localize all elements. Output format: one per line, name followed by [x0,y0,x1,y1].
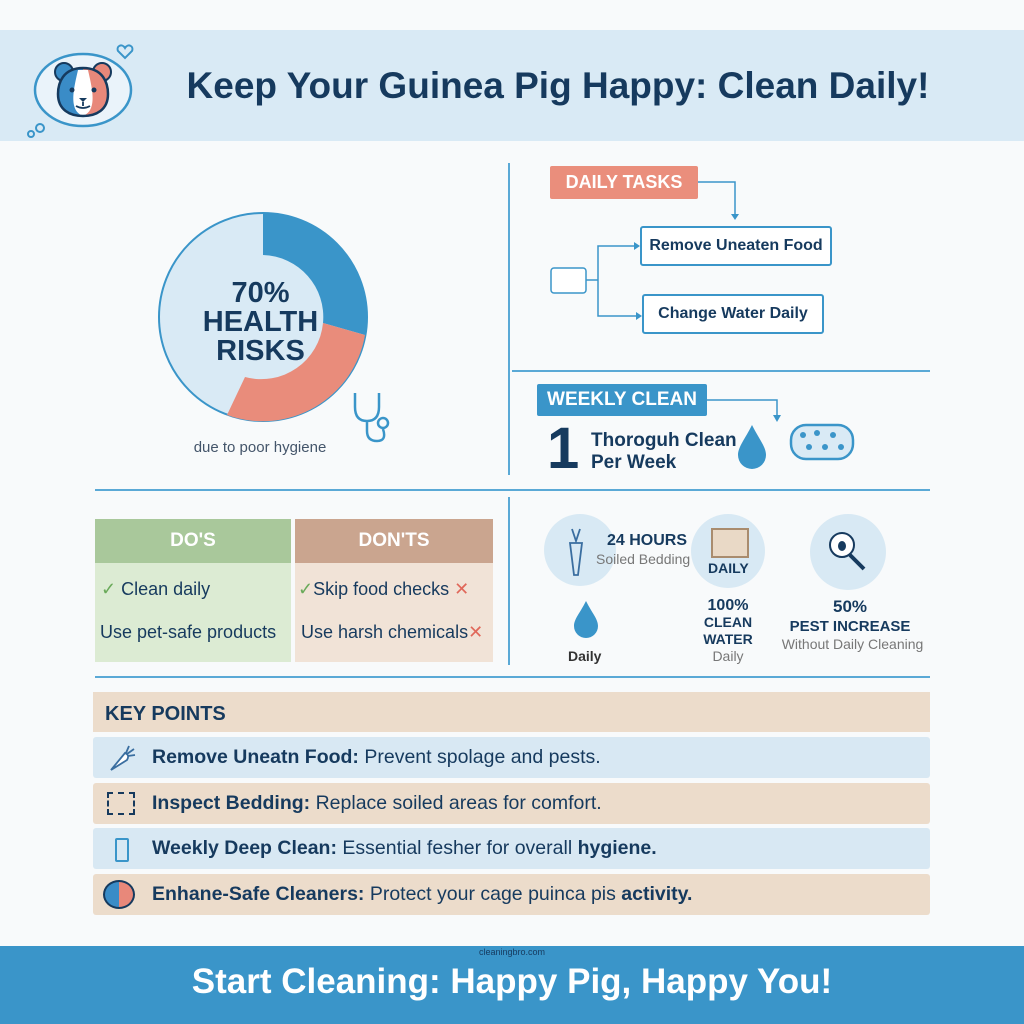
icon: stethoscope [354,393,390,442]
task box: change water: Change Water Daily [658,305,808,322]
key point: weekly deep clean: Weekly Deep Clean: Essential fesher for overall hygiene. [152,837,657,859]
big number 1: 1 [547,416,579,481]
stat: 24 hours [544,514,616,586]
donut label [203,277,318,367]
icon: guinea pig speech bubble [27,44,134,138]
stats panel: Soiled Bedding [596,551,690,567]
key point: remove uneaten food [93,737,930,778]
donut label: HEALTH [203,306,318,338]
label: weekly clean: WEEKLY CLEAN [547,389,697,410]
task box: remove uneaten food [640,226,832,266]
stats panel [544,514,923,664]
donut label: RISKS [216,335,305,367]
label: daily tasks [550,166,698,199]
footer slogan: Start Cleaning: Happy Pig, Happy You! [192,962,832,1001]
weekly text: Per Week [591,452,676,473]
icon: water drop [738,425,766,469]
stat: daily bedding [691,514,765,588]
stats panel: Daily [712,648,744,664]
panel: don'ts: ✓Skip food checks ✕ [298,579,469,599]
header band [0,30,1024,141]
panel: don'ts: Use harsh chemicals✕ [301,622,483,642]
stats panel: Daily [568,648,601,664]
stat: 100% clean water [703,597,753,647]
weekly clean section [537,384,854,481]
key points header: KEY POINTS [105,703,226,725]
title: Keep Your Guinea Pig Happy: Clean Daily! [187,65,929,106]
panel: don'ts [295,519,493,662]
label: daily tasks: DAILY TASKS [566,172,682,192]
stat: 100% clean water: 100% [708,597,748,614]
stat: water daily [574,601,598,638]
key points header [93,692,930,732]
key point: inspect bedding [93,783,930,824]
icon: sponge [790,424,854,460]
key point: weekly deep clean [93,828,930,869]
source: cleaningbro.com [479,947,545,957]
stats panel: 24 HOURS [607,532,687,549]
key point: inspect bedding: Inspect Bedding: Replace soiled areas for comfort. [152,792,602,814]
donut chart: 70% health risks [158,212,390,456]
panel: do's: ✓ Clean daily [101,579,210,599]
caption: due to poor hygiene [194,439,326,456]
weekly text [591,430,737,473]
key point: safe cleaners [93,874,930,915]
footer banner [0,946,1024,1024]
label: weekly clean [537,384,707,416]
stats panel: Without Daily Cleaning [782,636,923,652]
weekly text: Thoroguh Clean [591,430,737,451]
task box: remove uneaten food: Remove Uneaten Food [649,237,823,254]
stats panel: PEST INCREASE [790,618,910,635]
panel: do's: Use pet-safe products [100,622,276,642]
stat: 100% clean water: CLEAN [704,614,752,630]
stats panel: 50% [833,597,867,616]
stat: 100% clean water: WATER [703,631,753,647]
flowchart: daily tasks [550,166,832,334]
key point: remove uneaten food: Remove Uneatn Food: Prevent spolage and pests. [152,746,601,768]
panel: do's: DO'S [170,530,216,551]
donut label: 70% [231,277,290,309]
stat: 50% pest increase [810,514,886,590]
stats panel: DAILY [708,560,749,576]
panel: do's [95,519,291,662]
key point: safe cleaners: Enhane-Safe Cleaners: Protect your cage puinca pis activity. [152,883,692,905]
panel: don'ts: DON'TS [358,530,430,551]
task box: change water [642,294,824,334]
